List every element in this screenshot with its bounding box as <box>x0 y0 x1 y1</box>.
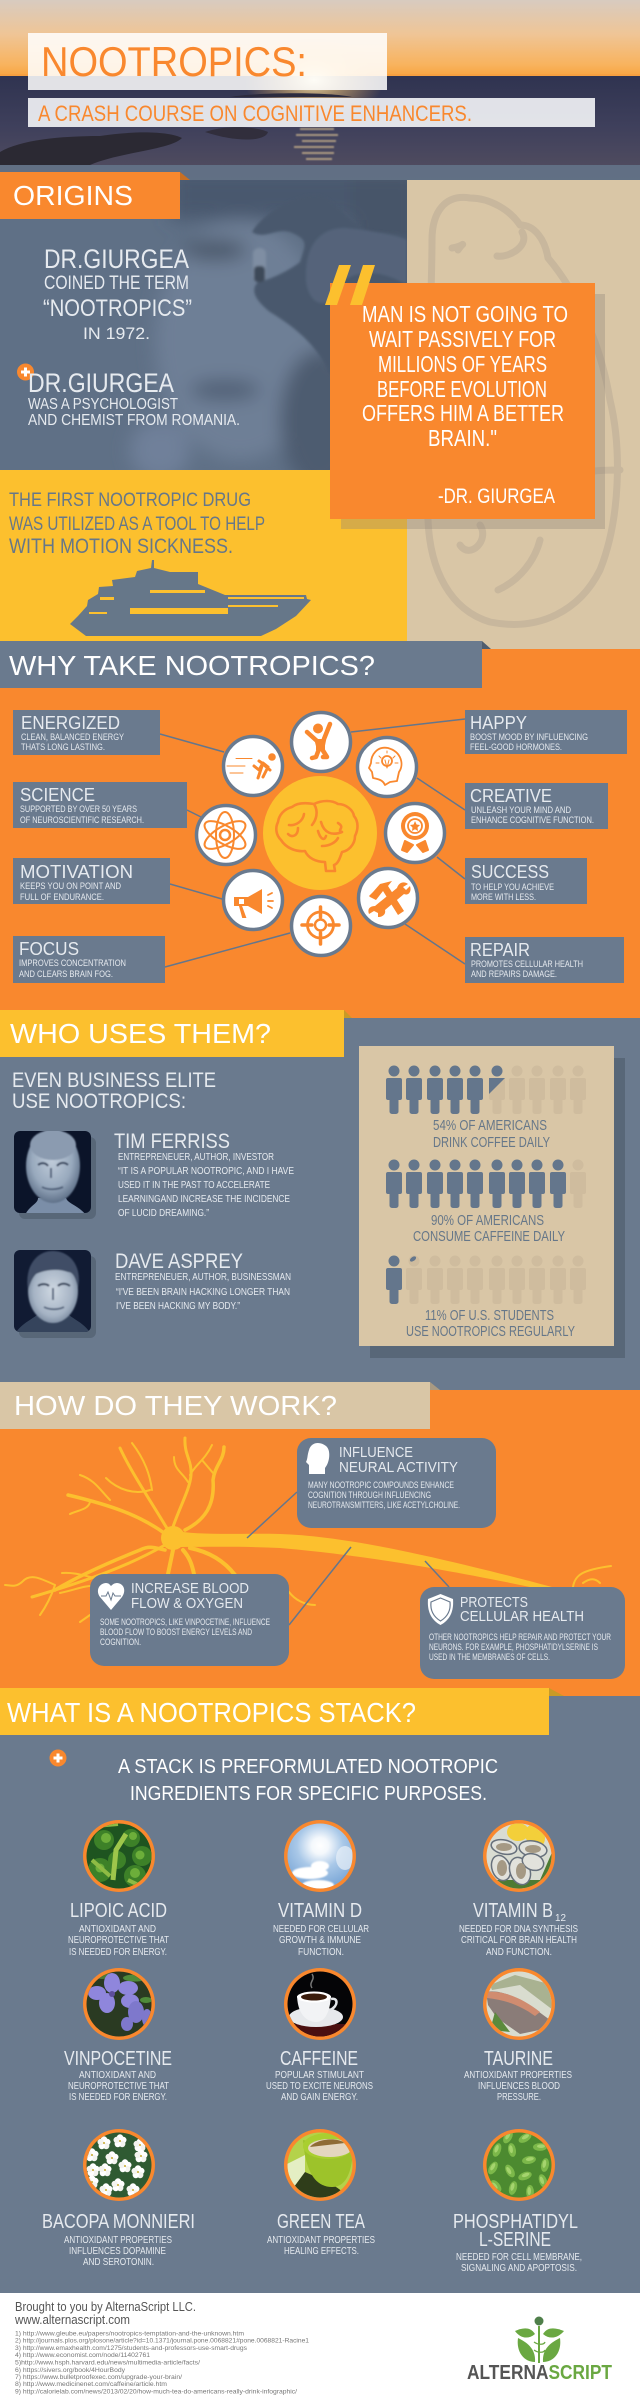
panel: who uses them background <box>0 1018 640 1390</box>
text: Dave Asprey: “I'VE BEEN BRAIN HACKING LONGER THAN <box>116 1286 290 1298</box>
photo: oysters and lemon <box>485 1822 553 1890</box>
item: vitamin D: NEEDED FOR CELLULAR <box>273 1923 369 1935</box>
item: caffeine <box>266 1968 373 2103</box>
callout: quote box: WAIT PASSIVELY FOR <box>369 326 556 352</box>
panel: origins band <box>0 172 190 219</box>
text: Tim Ferriss: OF LUCID DREAMING.” <box>118 1207 209 1219</box>
text: Dr. Giurgea psychologist: DR.GIURGEA <box>28 368 174 398</box>
item: vitamin D <box>273 1820 369 1958</box>
icon: hammer and wrench <box>358 868 418 928</box>
text: references: 1) http://www.gleube.eu/papers/nootropics-temptation-and-the-unknown.htm <box>15 2330 244 2338</box>
item: phosphatidyl l-serine: SIGNALING AND APOPTOSIS. <box>461 2262 577 2274</box>
callout: increase blood flow: BLOOD FLOW TO BOOST ENERGY LEVELS AND <box>100 1627 252 1637</box>
callout: influence neural activity: MANY NOOTROPIC COMPOUNDS ENHANCE <box>308 1480 454 1490</box>
text: Dr. Giurgea coined the term: COINED THE TERM <box>44 273 189 294</box>
photo: Tim Ferriss portrait <box>14 1129 96 1219</box>
text: Dr. Giurgea coined the term: “NOOTROPICS” <box>43 295 192 322</box>
label: energized <box>13 710 160 755</box>
chart: 54 percent coffee: DRINK COFFEE DAILY <box>433 1135 550 1151</box>
label: happy <box>465 710 627 754</box>
label: repair: REPAIR <box>470 940 530 960</box>
text: references <box>15 2330 310 2396</box>
callout: increase blood flow: FLOW & OXYGEN <box>131 1595 243 1612</box>
label: happy: BOOST MOOD BY INFLUENCING <box>470 732 588 743</box>
text: stack definition: A STACK IS PREFORMULATED NOOTROPIC <box>118 1756 498 1778</box>
text: Dr. Giurgea psychologist: AND CHEMIST FROM ROMANIA. <box>28 412 240 429</box>
text: Dave Asprey: I'VE BEEN HACKING MY BODY.” <box>116 1300 240 1312</box>
photo: periwinkle flowers <box>85 1970 153 2038</box>
item: bacopa monnieri: ANTIOXIDANT PROPERTIES <box>64 2234 172 2246</box>
icon: runner <box>224 736 282 796</box>
icon: head with lightbulb <box>358 738 416 796</box>
callout: protects cellular health: USED IN THE MEMBRANES OF CELLS. <box>429 1652 550 1662</box>
icon: plus badge <box>17 364 34 380</box>
icon: jumping figure <box>292 712 350 772</box>
text: Tim Ferriss: “IT IS A POPULAR NOOTROPIC, AND I HAVE <box>118 1165 294 1177</box>
panel: why take nootropics background <box>0 649 640 1018</box>
label: motivation: FULL OF ENDURANCE. <box>20 892 104 903</box>
label: focus: IMPROVES CONCENTRATION <box>19 958 126 969</box>
text: Dr. Giurgea coined the term: IN 1972. <box>83 324 150 343</box>
heading: why take nootropics: WHY TAKE NOOTROPICS? <box>9 650 375 681</box>
item: lipoic acid: ANTIOXIDANT AND <box>79 1923 156 1935</box>
text: motion sickness fact: WAS UTILIZED AS A TOOL TO HELP <box>9 514 265 535</box>
label: energized: ENERGIZED <box>21 713 120 733</box>
item: taurine <box>464 1968 572 2103</box>
title block: NOOTROPICS: <box>41 38 307 85</box>
chart: 90 percent caffeine: CONSUME CAFFEINE DAILY <box>413 1229 565 1245</box>
photo: green tea cup <box>288 2132 352 2198</box>
chart: 54 percent coffee <box>386 1066 586 1151</box>
logo: AlternaScript: ALTERNASCRIPT <box>467 2362 612 2384</box>
photo: white flowers <box>86 2132 152 2198</box>
callout: protects cellular health: PROTECTS <box>460 1594 528 1611</box>
panel: how do they work background <box>0 1390 640 1696</box>
item: vitamin D: FUNCTION. <box>298 1946 344 1958</box>
label: success: MORE WITH LESS. <box>471 892 536 903</box>
callout: quote box: MAN IS NOT GOING TO <box>362 301 568 327</box>
panel: tan brain panel <box>407 180 640 652</box>
text: references: 3) http://www.emaxhealth.com/1275/students-and-professors-use-smart-drugs <box>15 2345 247 2352</box>
text: even business elite: EVEN BUSINESS ELITE <box>12 1069 216 1092</box>
chart: 11 percent nootropics: USE NOOTROPICS REGULARLY <box>406 1324 575 1340</box>
connector lines <box>160 719 465 967</box>
label: energized: THATS LONG LASTING. <box>21 742 105 753</box>
label: motivation <box>13 858 170 904</box>
text: motion sickness fact: WITH MOTION SICKNESS. <box>9 535 233 558</box>
item: green tea <box>267 2129 375 2257</box>
item: vinpocetine <box>64 1968 172 2103</box>
item: caffeine: CAFFEINE <box>280 2048 358 2070</box>
item: phosphatidyl l-serine: NEEDED FOR CELL MEMBRANE, <box>456 2251 582 2263</box>
icon: plus badge <box>50 1750 66 1766</box>
callout: influence neural activity: NEUROTRANSMITTERS, LIKE ACETYLCHOLINE. <box>308 1500 460 1510</box>
text: Tim Ferriss: TIM FERRISS <box>114 1130 230 1153</box>
heading: what is a nootropics stack <box>0 1688 564 1735</box>
heading: how do they work: HOW DO THEY WORK? <box>14 1390 337 1421</box>
item: lipoic acid: LIPOIC ACID <box>70 1900 167 1922</box>
item: bacopa monnieri: BACOPA MONNIERI <box>42 2211 195 2233</box>
connector lines to callouts <box>247 1492 449 1625</box>
item: vitamin D: VITAMIN D <box>278 1900 362 1922</box>
item: vitamin B12: VITAMIN B <box>473 1900 553 1922</box>
item: caffeine: POPULAR STIMULANT <box>275 2069 364 2081</box>
text: references: 5)http://www.hsph.harvard.edu/news/multimedia-article/facts/ <box>15 2360 200 2366</box>
icon: award rosette <box>386 804 444 862</box>
label: success: TO HELP YOU ACHIEVE <box>471 882 554 893</box>
item: bacopa monnieri: AND SEROTONIN. <box>83 2256 154 2268</box>
hero photo: sunset over sea <box>0 0 640 180</box>
text: Dave Asprey: DAVE ASPREY <box>115 1250 243 1273</box>
label: focus <box>13 936 165 983</box>
text: references: 4) http://www.economist.com/node/11402761 <box>15 2352 151 2359</box>
chart: 54 percent coffee: 54% OF AMERICANS <box>433 1118 547 1134</box>
item: phosphatidyl l-serine: L-SERINE <box>479 2229 551 2251</box>
item: taurine: PRESSURE. <box>497 2091 541 2103</box>
text: references: 8) http://www.medicinenet.com/caffeine/article.htm <box>15 2381 167 2388</box>
callout: quote box: OFFERS HIM A BETTER <box>362 400 564 426</box>
chart: 90 percent caffeine <box>386 1160 586 1245</box>
photo: salmon fillet <box>485 1970 553 2038</box>
label: motivation: KEEPS YOU ON POINT AND <box>20 881 121 892</box>
text: credits: www.alternascript.com <box>14 2312 130 2327</box>
heading: how do they work <box>0 1382 440 1429</box>
text: credits: Brought to you by AlternaScript LLC. <box>15 2299 196 2314</box>
label: happy: FEEL-GOOD HORMONES. <box>470 742 562 753</box>
callout: protects cellular health: CELLULAR HEALTH <box>460 1608 584 1625</box>
text: credits <box>14 2299 196 2327</box>
item: vitamin B12: 12 <box>555 1913 566 1924</box>
icon: large brain outline <box>427 197 620 624</box>
text: Tim Ferriss: USED IT IN THE PAST TO ACCELERATE <box>118 1179 270 1191</box>
label: repair: PROMOTES CELLULAR HEALTH <box>471 959 583 970</box>
photo: cup of coffee <box>288 1972 352 2036</box>
icon: atom <box>196 806 256 864</box>
text: even business elite <box>12 1069 216 1113</box>
panel: footer <box>0 2293 640 2400</box>
item: vitamin D: GROWTH & IMMUNE <box>279 1934 361 1946</box>
text: motion sickness fact <box>9 490 265 558</box>
text: Dr. Giurgea psychologist <box>28 368 240 429</box>
callout: increase blood flow: SOME NOOTROPICS, LIKE VINPOCETINE, INFLUENCE <box>100 1617 270 1627</box>
photo: sun and sky <box>288 1824 352 1888</box>
text: references: 6) https://sivers.org/book/4HourBody <box>15 2367 126 2374</box>
item: taurine: ANTIOXIDANT PROPERTIES <box>464 2069 572 2081</box>
item: vinpocetine: IS NEEDED FOR ENERGY. <box>69 2091 167 2103</box>
item: taurine: TAURINE <box>484 2048 553 2070</box>
icon: head with gears <box>306 1443 329 1474</box>
icon: cruise ship <box>70 560 311 636</box>
label: focus: AND CLEARS BRAIN FOG. <box>19 969 113 980</box>
text: Dr. Giurgea psychologist: WAS A PSYCHOLOGIST <box>28 396 178 413</box>
text: Tim Ferriss: ENTREPRENEUER, AUTHOR, INVESTOR <box>118 1151 274 1163</box>
chart: 11 percent nootropics <box>386 1255 586 1340</box>
photo: Dave Asprey portrait <box>14 1250 96 1338</box>
label: science: SCIENCE <box>20 785 95 805</box>
item: caffeine: USED TO EXCITE NEURONS <box>266 2080 373 2092</box>
label: creative: CREATIVE <box>470 786 552 806</box>
callout: protects cellular health <box>420 1587 625 1679</box>
panel: origins band: ORIGINS <box>13 180 133 211</box>
item: green tea: HEALING EFFECTS. <box>284 2245 359 2257</box>
callout: increase blood flow: INCREASE BLOOD <box>131 1580 249 1597</box>
item: green tea: GREEN TEA <box>277 2211 366 2233</box>
label: success: SUCCESS <box>471 862 549 882</box>
label: creative <box>465 783 608 829</box>
chart: 11 percent nootropics: 11% OF U.S. STUDENTS <box>425 1308 554 1324</box>
item: lipoic acid: IS NEEDED FOR ENERGY. <box>69 1946 167 1958</box>
item: bacopa monnieri <box>42 2129 195 2268</box>
label: success <box>465 858 587 904</box>
item: vinpocetine: NEUROPROTECTIVE THAT <box>68 2080 169 2092</box>
label: science <box>13 782 187 828</box>
item: vitamin B12: NEEDED FOR DNA SYNTHESIS <box>459 1923 578 1935</box>
item: caffeine: AND GAIN ENERGY. <box>281 2091 358 2103</box>
item: taurine: INFLUENCES BLOOD <box>478 2080 560 2092</box>
label: repair: AND REPAIRS DAMAGE. <box>471 969 557 980</box>
callout: quote box: BEFORE EVOLUTION <box>377 376 547 402</box>
label: happy: HAPPY <box>470 713 527 733</box>
text: stack definition <box>118 1756 498 1805</box>
callout: influence neural activity: INFLUENCE <box>339 1444 413 1461</box>
item: phosphatidyl l-serine: PHOSPHATIDYL <box>453 2211 578 2233</box>
label: creative: ENHANCE COGNITIVE FUNCTION. <box>471 815 594 826</box>
title block: A CRASH COURSE ON COGNITIVE ENHANCERS. <box>38 101 472 126</box>
label: creative: UNLEASH YOUR MIND AND <box>471 805 571 816</box>
heading: who uses them: WHO USES THEM? <box>10 1018 271 1049</box>
item: vitamin B12: CRITICAL FOR BRAIN HEALTH <box>461 1934 577 1946</box>
heading: who uses them <box>0 1010 352 1057</box>
item: green tea: ANTIOXIDANT PROPERTIES <box>267 2234 375 2246</box>
callout: quote box: MILLIONS OF YEARS <box>378 351 547 377</box>
text: Dr. Giurgea coined the term: DR.GIURGEA <box>44 244 189 274</box>
label: science: OF NEUROSCIENTIFIC RESEARCH. <box>20 815 144 826</box>
heading: why take nootropics <box>0 641 491 688</box>
logo: AlternaScript <box>467 2316 612 2384</box>
icon: shield <box>428 1594 453 1625</box>
panel: origins photo background <box>0 180 407 470</box>
item: vitamin B12: AND FUNCTION. <box>486 1946 552 1958</box>
panel: statistics <box>359 1046 625 1358</box>
text: references: 9) http://calorielab.com/news/2013/02/20/how-much-tea-do-americans-really-drink-infographic/ <box>15 2388 297 2396</box>
text: Tim Ferriss: LEARNINGAND INCREASE THE INCIDENCE <box>118 1193 290 1205</box>
icon: heart with pulse <box>98 1583 124 1610</box>
label: science: SUPPORTED BY OVER 50 YEARS <box>20 804 137 815</box>
callout: quote box: BRAIN." <box>428 425 497 451</box>
callout: quote box: -DR. GIURGEA <box>438 485 555 508</box>
item: bacopa monnieri: INFLUENCES DOPAMINE <box>69 2245 166 2257</box>
label: repair <box>465 937 624 983</box>
callout: increase blood flow: COGNITION. <box>100 1637 141 1647</box>
icon: megaphone <box>224 870 282 930</box>
text: Tim Ferriss <box>114 1130 294 1219</box>
text: Dr. Giurgea coined the term <box>43 244 192 343</box>
label: energized: CLEAN, BALANCED ENERGY <box>21 732 125 743</box>
chart: 90 percent caffeine: 90% OF AMERICANS <box>431 1213 544 1229</box>
diagram: neuron <box>5 1438 611 1622</box>
text: motion sickness fact: THE FIRST NOOTROPIC DRUG <box>9 490 251 511</box>
item: vinpocetine: ANTIOXIDANT AND <box>79 2069 156 2081</box>
text: Dave Asprey: ENTREPRENEUER, AUTHOR, BUSINESSMAN <box>115 1271 291 1283</box>
icon: central brain <box>263 776 377 890</box>
item: lipoic acid: NEUROPROTECTIVE THAT <box>68 1934 169 1946</box>
callout: influence neural activity <box>297 1438 496 1528</box>
callout: influence neural activity: NEURAL ACTIVITY <box>339 1459 458 1476</box>
icon: target crosshair <box>292 896 350 956</box>
heading: what is a nootropics stack: WHAT IS A NOOTROPICS STACK? <box>7 1697 416 1728</box>
text: references: 2) http://journals.plos.org/plosone/article?id=10.1371/journal.pone.0068821#pone.0068821-Racine1 <box>15 2338 310 2345</box>
text: even business elite: USE NOOTROPICS: <box>12 1090 186 1113</box>
panel: nootropics stack background <box>0 1696 640 2293</box>
text: Dave Asprey <box>115 1250 291 1312</box>
callout: influence neural activity: COGNITION THROUGH INFLUENCING <box>308 1490 431 1500</box>
text: references: 7) https://www.bulletproofexec.com/upgrade-your-brain/ <box>15 2374 182 2381</box>
photo: broccoli <box>85 1822 153 1890</box>
title block <box>28 33 595 127</box>
icon: quote marks <box>325 265 375 305</box>
label: focus: FOCUS <box>19 939 79 959</box>
callout: increase blood flow <box>90 1574 289 1666</box>
callout: quote box <box>325 265 605 529</box>
item: vitamin B12 <box>459 1820 578 1958</box>
item: phosphatidyl l-serine <box>453 2129 582 2274</box>
item: vinpocetine: VINPOCETINE <box>64 2048 172 2070</box>
item: lipoic acid <box>68 1820 169 1958</box>
photo: green beans <box>486 2132 552 2198</box>
icon: caduceus and leaves <box>515 2316 564 2363</box>
text: stack definition: INGREDIENTS FOR SPECIFIC PURPOSES. <box>130 1783 487 1805</box>
panel: yellow motion sickness <box>0 470 407 642</box>
label: motivation: MOTIVATION <box>20 862 133 882</box>
